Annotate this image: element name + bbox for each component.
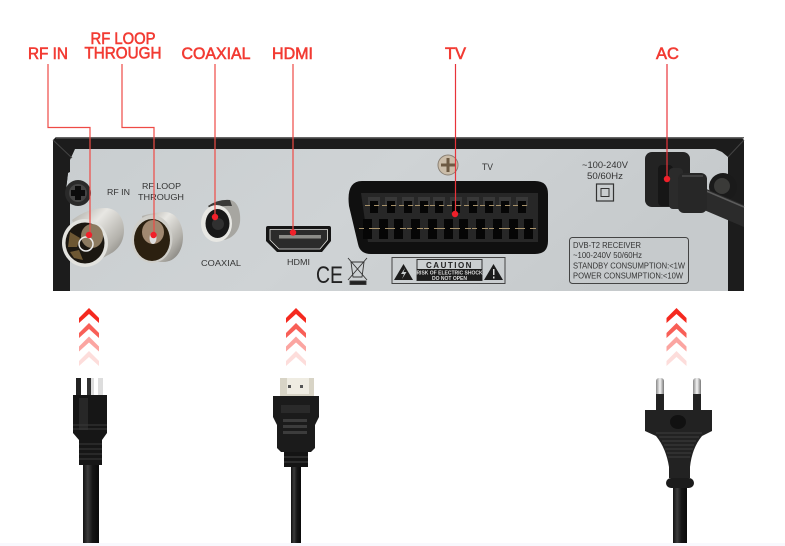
specification label: STANDBY CONSUMPTION:<1W	[573, 260, 685, 270]
callout: HDMI	[272, 45, 313, 236]
callout: AC	[656, 45, 679, 182]
arrows: AC plug chevrons	[666, 308, 686, 366]
callout: TV	[445, 45, 466, 217]
leader line: TV	[454, 64, 456, 214]
HDMI plug and cable	[273, 378, 319, 543]
icon: centre screw	[438, 155, 458, 175]
heading: TV: TV	[445, 45, 466, 63]
leader line: AC	[666, 64, 668, 179]
arrows: HDMI plug chevrons	[286, 308, 306, 366]
connector: coaxial	[201, 200, 240, 242]
heading: RF loop through	[84, 30, 162, 62]
leader line: HDMI	[292, 64, 294, 232]
text: HDMI port label: HDMI	[287, 257, 310, 267]
text: coaxial port label: COAXIAL	[201, 258, 241, 268]
arrows: RF plug chevrons	[79, 308, 99, 366]
connector: AC socket and power cord	[645, 152, 744, 227]
text: RF loop through port label	[138, 181, 184, 202]
text: RF loop through port label: THROUGH	[138, 192, 184, 202]
device rear panel	[53, 137, 744, 291]
callout: RF loop through	[84, 30, 162, 238]
specification label	[570, 238, 688, 284]
caution label: CAUTION	[426, 261, 473, 270]
RF plug and cable	[73, 378, 107, 543]
icon: WEEE crossed bin	[348, 258, 367, 284]
icon: double insulation square	[596, 184, 614, 201]
text: RF IN port label: RF IN	[107, 187, 130, 197]
heading: coaxial: COAXIAL	[182, 45, 250, 63]
caution label: RISK OF ELECTRIC SHOCK	[416, 270, 483, 276]
leader line: coaxial	[214, 64, 216, 217]
heading: AC: AC	[656, 45, 679, 63]
heading: RF loop through: THROUGH	[84, 44, 162, 62]
text: RF loop through port label: RF LOOP	[142, 181, 181, 191]
leader line: RF loop through	[122, 64, 154, 235]
callout: RF IN	[28, 45, 92, 238]
specification label: ~100-240V 50/60Hz	[573, 250, 642, 260]
icon: CE mark: CE	[316, 262, 343, 289]
connector: RF IN	[62, 208, 124, 267]
text: voltage rating: ~100-240V	[582, 160, 628, 170]
icon: left mounting screw	[65, 180, 91, 206]
connector: SCART TV	[349, 181, 548, 254]
heading: RF loop through: RF LOOP	[90, 30, 156, 48]
callout: coaxial	[182, 45, 250, 220]
specification label: POWER CONSUMPTION:<10W	[573, 270, 683, 280]
connector: RF loop through	[132, 212, 183, 263]
heading: HDMI: HDMI	[272, 45, 313, 63]
connector: HDMI	[266, 226, 331, 252]
text: voltage rating: 50/60Hz	[587, 171, 624, 181]
text: voltage rating	[582, 160, 628, 181]
text: TV port label: TV	[482, 162, 493, 172]
caution label	[392, 258, 505, 284]
leader line: RF IN	[48, 64, 90, 235]
AC plug and cable	[645, 378, 712, 543]
specification label: DVB-T2 RECEIVER	[573, 240, 641, 250]
caution label: DO NOT OPEN	[432, 276, 467, 282]
heading: RF IN: RF IN	[28, 45, 68, 63]
